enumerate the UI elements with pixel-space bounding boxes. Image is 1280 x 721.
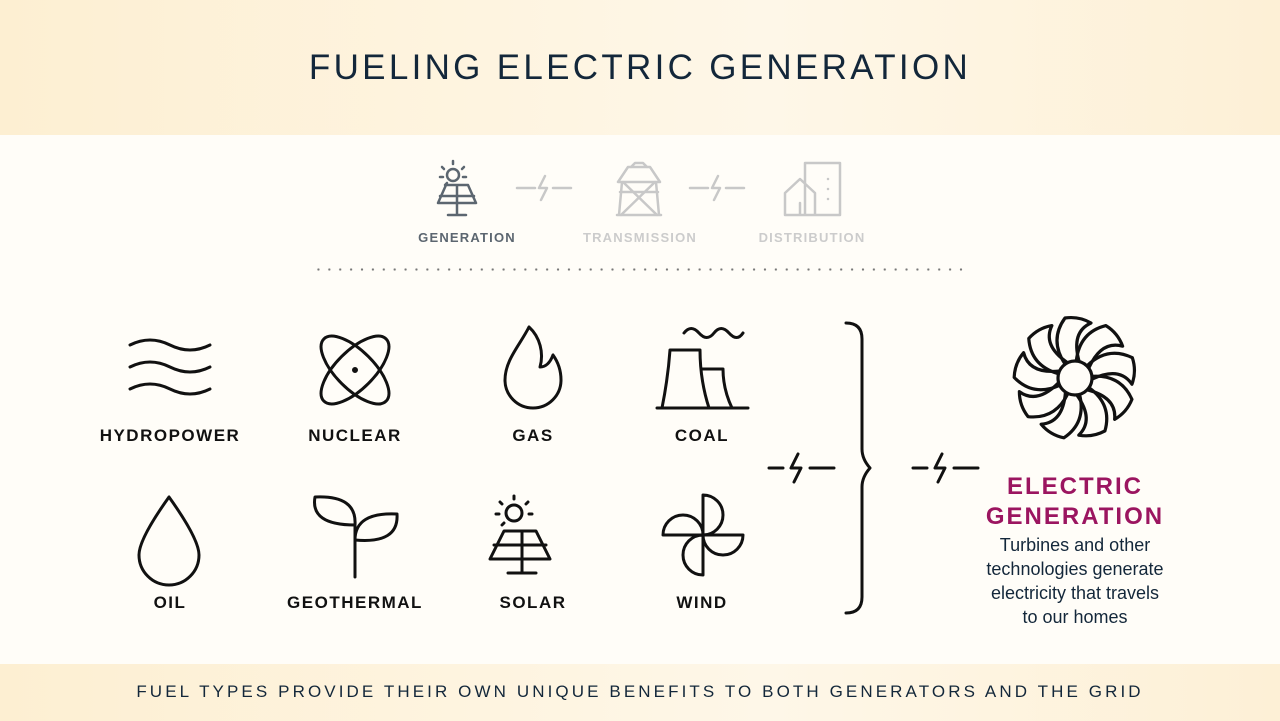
icon: hydropower	[130, 340, 210, 394]
label solar: SOLAR	[500, 593, 566, 612]
label hydropower: HYDROPOWER	[100, 426, 240, 445]
header band	[0, 0, 1280, 135]
icon: distribution building	[785, 163, 840, 215]
label coal: COAL	[675, 426, 729, 445]
icon: gas	[505, 327, 561, 408]
icon: coal	[657, 328, 748, 408]
icon: solar generation	[438, 161, 476, 215]
footer text: FUEL TYPES PROVIDE THEIR OWN UNIQUE BENEFITS TO BOTH GENERATORS AND THE GRID	[136, 682, 1144, 701]
arrow right	[913, 454, 978, 482]
electric generation text block: Turbines and other technologies generate electricity that travels	[986, 535, 1164, 603]
footer band	[0, 664, 1280, 721]
electric generation text block: GENERATION	[986, 503, 1164, 530]
title: FUELING ELECTRIC GENERATION	[309, 48, 971, 87]
label distribution: DISTRIBUTION	[759, 230, 865, 245]
arrow	[690, 176, 744, 200]
icon: wind	[663, 495, 743, 575]
icon: nuclear	[310, 325, 400, 415]
label wind: WIND	[676, 593, 728, 612]
label oil: OIL	[154, 593, 186, 612]
arrow	[517, 176, 571, 200]
fuel icons grid	[100, 325, 750, 612]
electric generation text block: to our homes	[1022, 607, 1128, 627]
label gas: GAS	[512, 426, 554, 445]
process diagram: generation, transmission, distribution	[418, 160, 865, 245]
brace	[846, 323, 870, 613]
electric generation text block	[986, 473, 1164, 627]
icon: solar	[490, 496, 550, 573]
electric generation text block: ELECTRIC	[1007, 473, 1143, 500]
brace with arrows	[768, 322, 980, 614]
label transmission: TRANSMISSION	[583, 230, 697, 245]
icon: oil	[139, 497, 199, 585]
label geothermal: GEOTHERMAL	[287, 593, 423, 612]
arrow left	[769, 454, 834, 482]
label generation: GENERATION	[418, 230, 516, 245]
label nuclear: NUCLEAR	[308, 426, 402, 445]
icon: transmission tower	[617, 163, 661, 215]
icon: turbine	[1012, 316, 1136, 440]
icon: geothermal	[314, 497, 397, 577]
